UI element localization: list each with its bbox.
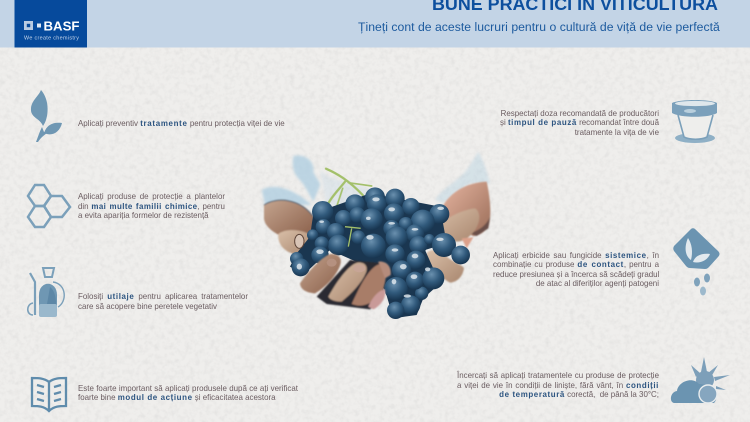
BASF logo box: We create chemistry — [24, 36, 79, 42]
icon: seed bag with droplets — [673, 228, 720, 296]
text block: condiții de temperatură — [456, 370, 659, 399]
icon: leaf sprout — [31, 90, 62, 142]
text block: condiții de temperatură: de temperatură corectă, de până la 30°C; — [499, 390, 659, 399]
finger nails — [295, 234, 365, 272]
text block: sistemice: Aplicați erbicide sau fungicide sistemice, în — [493, 251, 659, 260]
text block: sistemice: de atac al diferiților agenți patogeni — [536, 279, 659, 288]
right hand — [427, 182, 490, 283]
text block: sistemice: combinație cu produse de contact, pentru a — [493, 260, 659, 269]
stem — [326, 169, 372, 212]
text block: timpul de pauză: Respectați doza recomandată de producători — [501, 109, 659, 118]
left hand fingers — [300, 254, 391, 309]
text block: condiții de temperatură: Încercați să aplicați tratamentele cu produse de protecție — [457, 371, 659, 380]
text block: modul de acțiune — [78, 384, 298, 402]
text block: sistemice: reduce presiunea și a încerca să scădeți gradul — [493, 270, 659, 279]
text block: modul de acțiune: Este foarte important să aplicați produsele după ce ați verificat — [78, 384, 298, 392]
text block: condiții de temperatură: a viței de vie în condiții de liniște, fără vânt, în condiții — [457, 380, 659, 390]
text block: familii chimice: din mai multe familii chimice, pentru — [78, 202, 225, 210]
grape cluster shadow — [290, 193, 447, 318]
subtitle: Țineți cont de aceste lucruri pentru o cultură de viță de vie perfectă — [358, 20, 720, 34]
BASF logo box: BASF — [44, 20, 80, 34]
text block: tratamente: Aplicați preventiv tratamente pentru protecția viței de vie — [78, 118, 285, 128]
text block: timpul de pauză: tratamente la vița de vie — [575, 128, 659, 137]
icon: flower pot — [672, 100, 717, 143]
grape highlights — [297, 197, 444, 298]
grapes — [290, 187, 470, 319]
text block: timpul de pauză: și timpul de pauză recomandat între două — [500, 118, 659, 127]
left palm and thumb — [264, 200, 313, 254]
text block: familii chimice — [78, 192, 225, 220]
text block: utilaje: care să acopere bine peretele vegetativ — [78, 302, 217, 310]
watercolor splashes — [262, 152, 490, 207]
text block: timpul de pauză — [500, 109, 660, 137]
text block: utilaje: Folosiți utilaje pentru aplicarea tratamentelor — [78, 292, 248, 301]
icon: hexagons — [28, 185, 70, 227]
BASF logo box — [14, 0, 87, 48]
icon: backpack sprayer — [28, 268, 64, 317]
inner stem — [345, 227, 361, 247]
text block: sistemice — [493, 251, 660, 288]
text block: familii chimice: Aplicați produse de protecție a plantelor — [78, 192, 225, 201]
icon: open book — [32, 378, 66, 411]
text block: familii chimice: a evita apariția formelor de rezistență — [78, 211, 209, 220]
central illustration: hands holding grapes — [262, 152, 490, 319]
text block: modul de acțiune: foarte bine modul de acțiune și eficacitatea acestora — [78, 393, 276, 402]
icon: sun behind cloud — [671, 357, 730, 403]
text block: utilaje — [78, 292, 248, 310]
header band — [0, 0, 750, 48]
